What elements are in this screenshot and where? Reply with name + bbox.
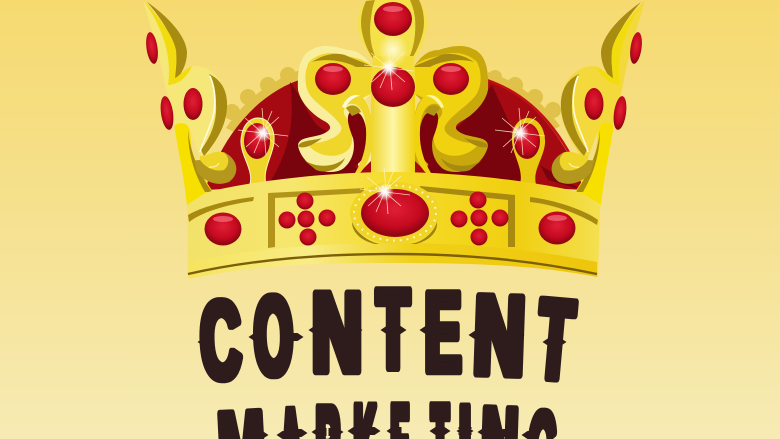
title: MARKETING: [216, 383, 559, 439]
crown: [143, 0, 645, 279]
letter spurs: CONTENT: [199, 326, 565, 346]
ruby highlights: [213, 6, 567, 222]
red velvet cap: [205, 78, 584, 190]
velvet shadow folds: [270, 82, 582, 190]
velvet bright edge: [487, 80, 572, 158]
title: CONTENT: T: [377, 267, 409, 392]
right scroll: [401, 46, 488, 173]
sparkles: [238, 43, 545, 214]
rim dark stripe: [188, 254, 597, 274]
title: CONTENT: O: [253, 274, 293, 399]
letter spurs: MARKETING: [221, 427, 535, 439]
band right notch: [530, 197, 598, 225]
left wing: [143, 0, 236, 205]
top lobe: [358, 0, 427, 100]
right panel: [420, 186, 515, 247]
crown band: [187, 172, 600, 279]
left gem setting: [241, 118, 274, 184]
rubies: [144, 2, 644, 246]
left scroll: [298, 46, 385, 173]
jewel setting with dots: [350, 182, 440, 244]
neck fill joining the top lobe: [370, 56, 416, 90]
centre column: [371, 85, 415, 180]
right gem setting: [512, 118, 545, 184]
title: CONTENT: N: [312, 270, 362, 395]
neck glow: [378, 32, 408, 68]
right wing: [552, 0, 645, 205]
band lower rim: [188, 243, 597, 279]
title: CONTENT: E: [425, 269, 461, 395]
title: CONTENT: T: [533, 276, 578, 403]
gold scallops behind the velvet: [224, 67, 561, 135]
title: CONTENT: [199, 267, 578, 403]
band left notch: [188, 197, 254, 222]
left panel: [268, 188, 364, 248]
central cross: [298, 0, 488, 180]
title: CONTENT: N: [472, 271, 527, 399]
band body: [187, 172, 600, 278]
title: CONTENT: C: [199, 279, 243, 403]
